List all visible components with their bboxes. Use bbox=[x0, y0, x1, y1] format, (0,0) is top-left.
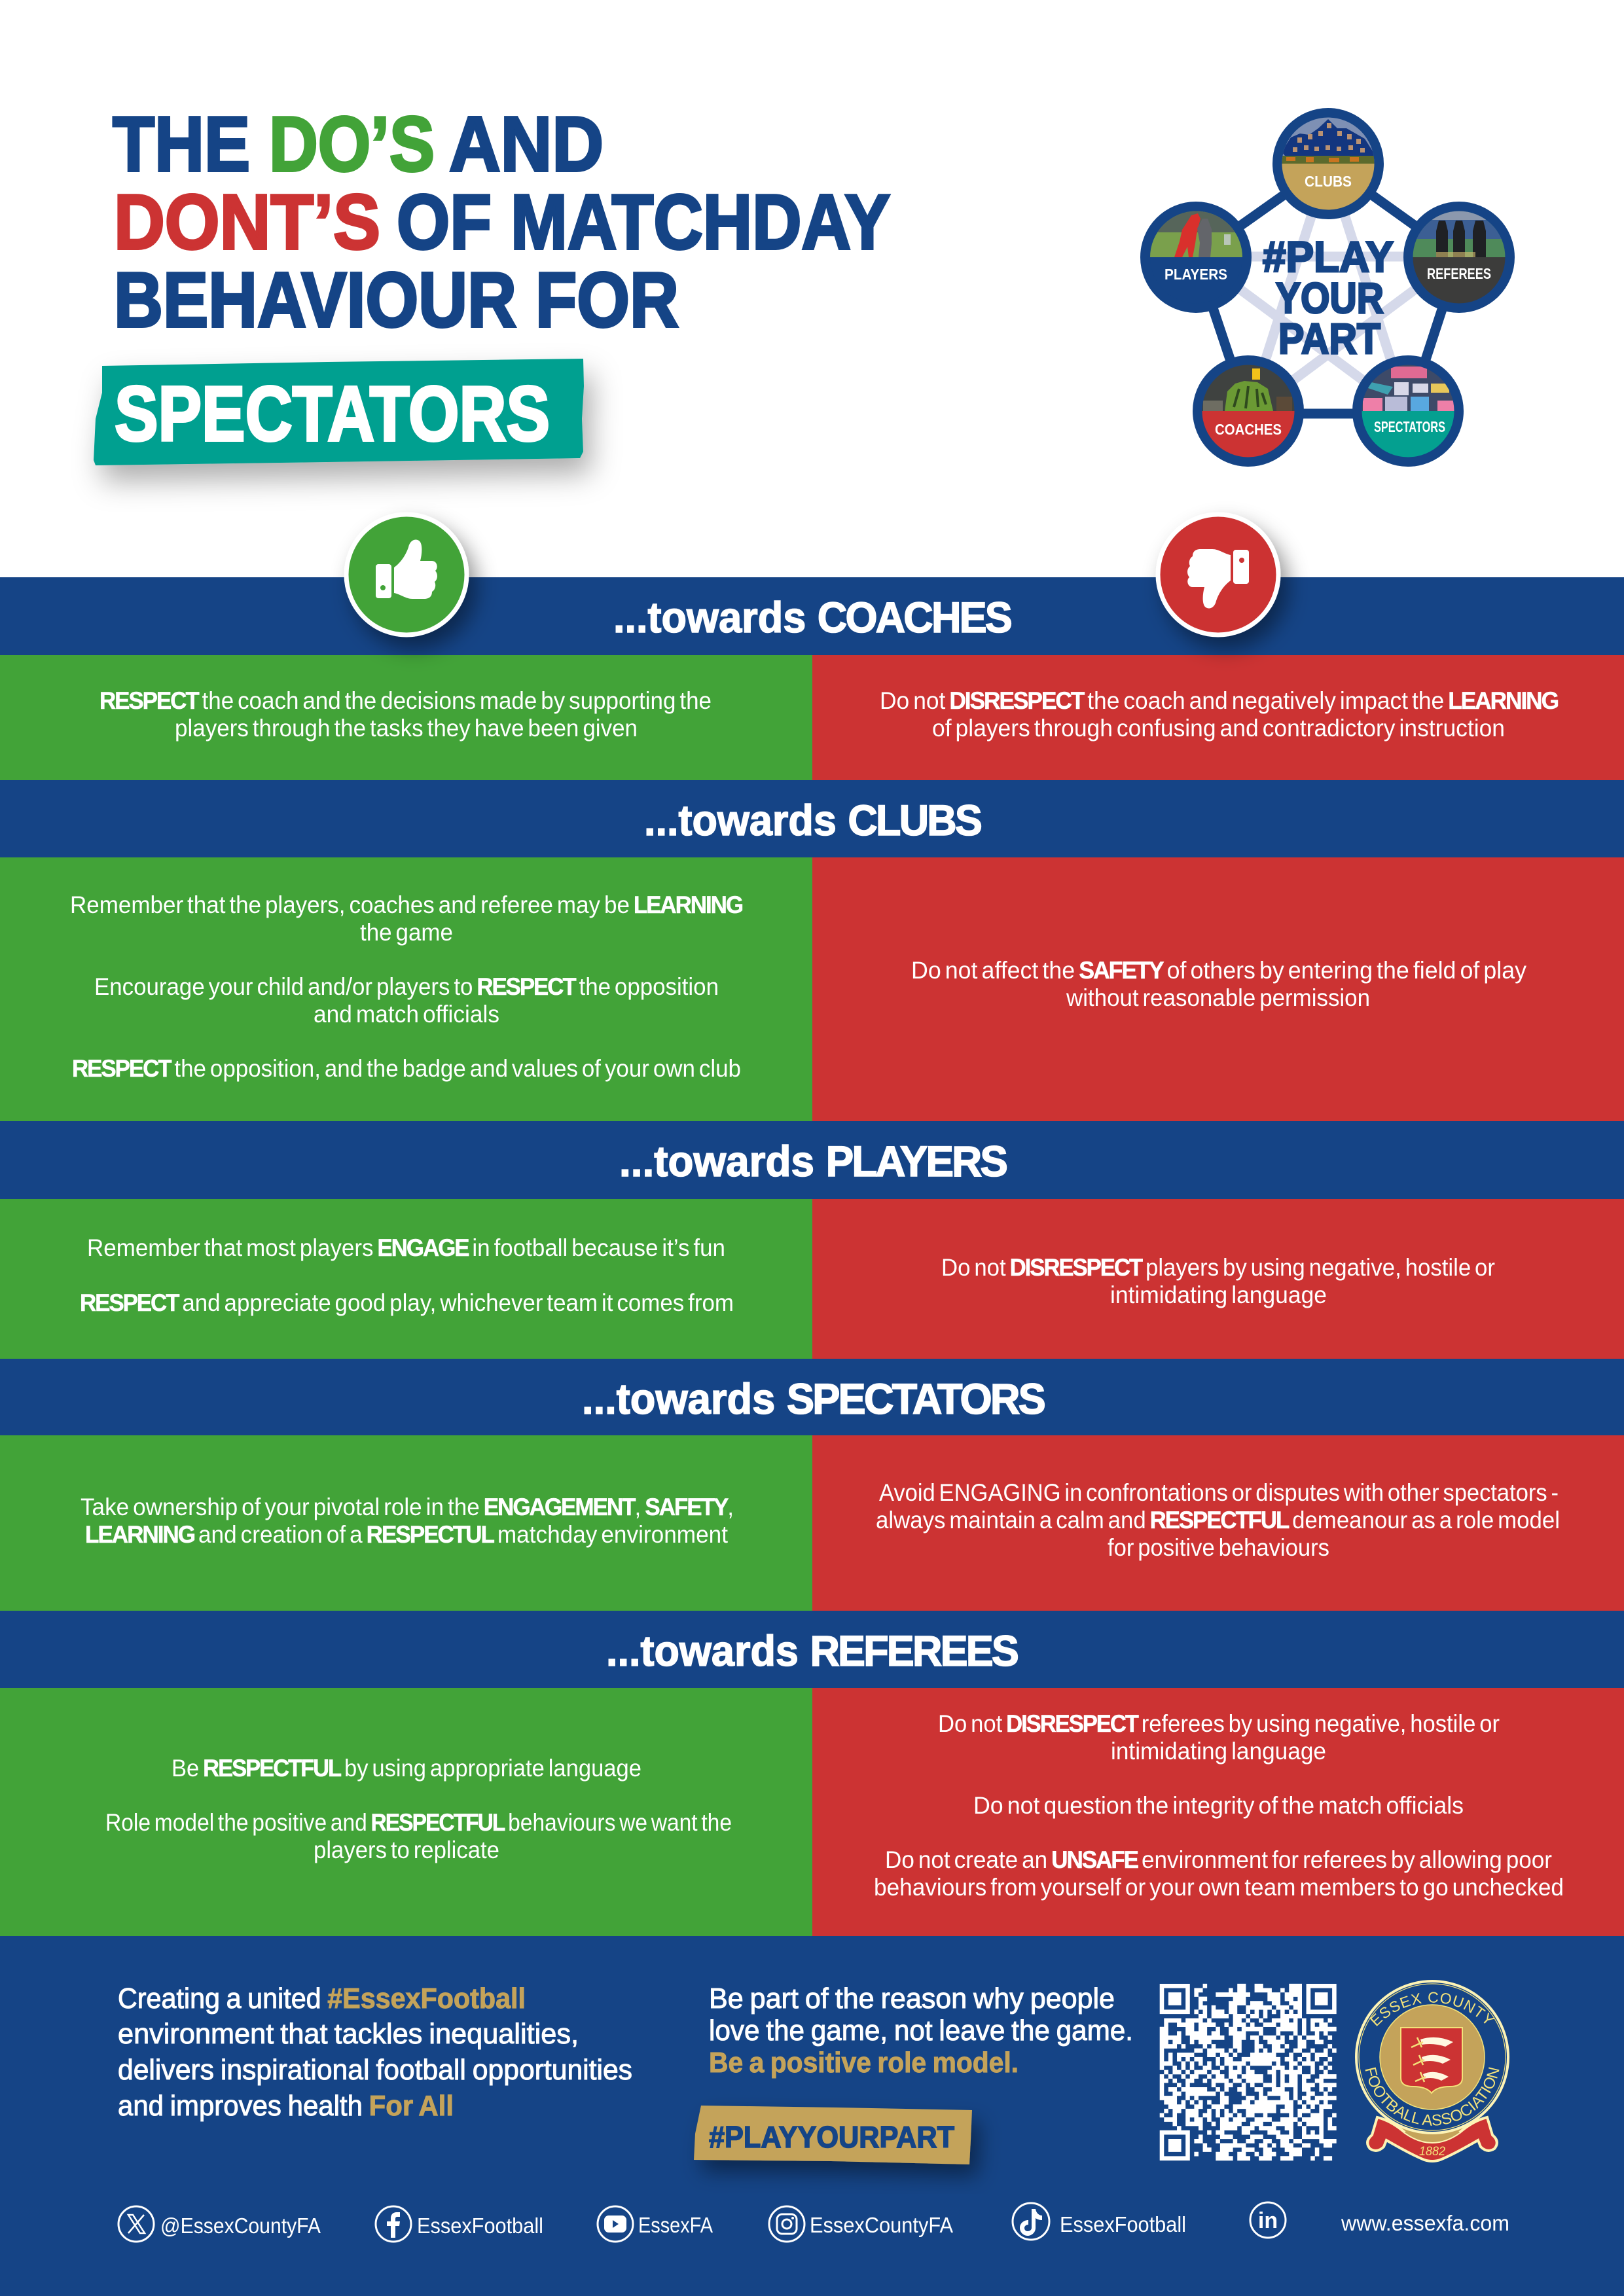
title: OF MATCHDAY bbox=[397, 179, 890, 266]
icon: thumbs up bbox=[346, 514, 467, 635]
social: linkedin: in bbox=[1258, 2208, 1278, 2233]
dont: players: intimidating language bbox=[1110, 1282, 1327, 1308]
text block: mission bbox=[118, 1982, 632, 2122]
dont: spectators: always maintain a calm and RESPECTFUL demeanour as a role model bbox=[876, 1507, 1560, 1534]
title: DO’S bbox=[269, 101, 435, 188]
qr code bbox=[1160, 1984, 1337, 2161]
node: referees: REFEREES bbox=[1427, 265, 1491, 282]
logo: essex county fa crest: FOOTBALL ASSOCIATION bbox=[1365, 2067, 1499, 2126]
dont: spectators: for positive behaviours bbox=[1108, 1534, 1329, 1561]
text block: role model: Be a positive role model. bbox=[709, 2047, 1019, 2079]
website: www.essexfa.com bbox=[1341, 2211, 1509, 2235]
heading: towards clubs: ...towards CLUBS bbox=[644, 796, 981, 844]
heading: towards coaches: ...towards COACHES bbox=[613, 593, 1011, 641]
node: players bbox=[1140, 202, 1252, 313]
hashtag: play your part: PART bbox=[1278, 314, 1380, 363]
text block: mission: delivers inspirational football opportunities bbox=[118, 2054, 632, 2086]
node: players: PLAYERS bbox=[1164, 266, 1227, 283]
social: facebook bbox=[376, 2206, 543, 2242]
do: coaches: RESPECT the coach and the decisions made by supporting the bbox=[99, 687, 712, 714]
banner bbox=[1398, 2121, 1466, 2146]
pentagon lines bbox=[1196, 164, 1459, 414]
dont: referees: behaviours from yourself or your own team members to go unchecked bbox=[874, 1874, 1564, 1901]
panel: footer bbox=[0, 1936, 1624, 2296]
do: clubs: Remember that the players, coaches and referee may be LEARNING bbox=[70, 891, 742, 918]
do: referees bbox=[0, 1688, 812, 1936]
node: spectators bbox=[1352, 355, 1464, 467]
dont: referees: intimidating language bbox=[1111, 1738, 1326, 1765]
do: coaches bbox=[0, 655, 812, 780]
node: coaches bbox=[1193, 355, 1304, 467]
social: instagram: EssexCountyFA bbox=[810, 2213, 953, 2237]
text block: mission: environment that tackles inequalities, bbox=[118, 2018, 579, 2050]
dont: clubs bbox=[812, 857, 1624, 1121]
dont: referees bbox=[812, 1688, 1624, 1936]
do: referees: players to replicate bbox=[314, 1837, 499, 1863]
dont: coaches: of players through confusing and contradictory instruction bbox=[932, 715, 1505, 742]
heading: towards coaches bbox=[0, 577, 1624, 655]
node: referees bbox=[1403, 202, 1515, 313]
text block: mission: and improves health For All bbox=[118, 2090, 454, 2122]
text block: mission: Creating a united #EssexFootball bbox=[118, 1982, 526, 2015]
text block: role model: love the game, not leave the game. bbox=[709, 2015, 1133, 2047]
dont: spectators bbox=[812, 1435, 1624, 1611]
ring bbox=[1356, 1981, 1508, 2133]
crest text: ESSEX COUNTY bbox=[1370, 1992, 1494, 2026]
title: BEHAVIOUR FOR bbox=[114, 257, 679, 344]
social: x: @EssexCountyFA bbox=[160, 2214, 321, 2238]
do: referees: Be RESPECTFUL by using appropriate language bbox=[171, 1755, 641, 1782]
do: clubs: Encourage your child and/or players to RESPECT the opposition bbox=[94, 973, 719, 1000]
shield bbox=[1401, 2028, 1462, 2093]
do: clubs bbox=[0, 857, 812, 1121]
heading: towards players: ...towards PLAYERS bbox=[619, 1137, 1007, 1185]
dont: spectators: Avoid ENGAGING in confrontations or disputes with other spectators - bbox=[879, 1479, 1559, 1506]
title: THE bbox=[113, 101, 250, 188]
node: coaches: COACHES bbox=[1215, 421, 1282, 438]
star lines bbox=[1196, 164, 1459, 414]
do: coaches: players through the tasks they have been given bbox=[175, 715, 638, 742]
title: DONT’S bbox=[114, 179, 380, 266]
node: clubs bbox=[1272, 108, 1384, 219]
logo: essex county fa crest: 1882 bbox=[1419, 2145, 1445, 2159]
dont: referees: Do not question the integrity of the match officials bbox=[973, 1792, 1464, 1819]
do: players: Remember that most players ENGAGE in football because it’s fun bbox=[87, 1234, 725, 1261]
node: spectators: SPECTATORS bbox=[1374, 418, 1445, 435]
panel: towards players bbox=[0, 1121, 1624, 1359]
heading: towards referees: ...towards REFEREES bbox=[606, 1626, 1018, 1675]
hashtag: play your part: #PLAY bbox=[1263, 232, 1394, 281]
do: spectators: Take ownership of your pivotal role in the ENGAGEMENT, SAFETY, bbox=[81, 1494, 734, 1520]
text block: role model: Be part of the reason why people bbox=[709, 1982, 1115, 2015]
badge: playyourpart: #PLAYYOURPART bbox=[709, 2120, 954, 2154]
social: tiktok bbox=[1013, 2203, 1186, 2240]
do: clubs: RESPECT the opposition, and the badge and values of your own club bbox=[72, 1055, 741, 1082]
dont: players: Do not DISRESPECT players by using negative, hostile or bbox=[941, 1254, 1495, 1281]
dont: coaches bbox=[812, 655, 1624, 780]
badge: playyourpart bbox=[694, 2106, 972, 2164]
social: x bbox=[118, 2206, 321, 2242]
do: spectators bbox=[0, 1435, 812, 1611]
social: tiktok: EssexFootball bbox=[1060, 2212, 1186, 2236]
panel: towards spectators bbox=[0, 1359, 1624, 1611]
dont: clubs: without reasonable permission bbox=[1066, 984, 1370, 1011]
social: instagram bbox=[769, 2206, 953, 2242]
dont: referees: Do not DISRESPECT referees by using negative, hostile or bbox=[938, 1710, 1500, 1737]
do: referees: Role model the positive and RESPECTFUL behaviours we want the bbox=[105, 1809, 732, 1836]
do: players: RESPECT and appreciate good play, whichever team it comes from bbox=[80, 1289, 734, 1316]
do: players bbox=[0, 1199, 812, 1359]
do: clubs: and match officials bbox=[314, 1001, 499, 1028]
heading: towards spectators: ...towards SPECTATORS bbox=[582, 1374, 1045, 1423]
title bbox=[113, 101, 890, 344]
logo: essex county fa crest bbox=[1355, 1980, 1509, 2162]
hashtag: play your part bbox=[1263, 232, 1394, 363]
heading: towards clubs bbox=[0, 780, 1624, 857]
seaxes bbox=[1420, 2037, 1453, 2047]
node: clubs: CLUBS bbox=[1305, 173, 1352, 190]
do: spectators: LEARNING and creation of a RESPECTUL matchday environment bbox=[85, 1521, 729, 1548]
social: facebook: EssexFootball bbox=[417, 2214, 543, 2238]
heading: towards referees bbox=[0, 1611, 1624, 1688]
graphic: play your part pentagon bbox=[1140, 108, 1515, 467]
social: youtube: EssexFA bbox=[638, 2213, 713, 2237]
dont: referees: Do not create an UNSAFE environment for referees by allowing poor bbox=[885, 1846, 1552, 1873]
dont: players bbox=[812, 1199, 1624, 1359]
heading: towards players bbox=[0, 1121, 1624, 1199]
do: clubs: the game bbox=[360, 919, 453, 946]
heading: towards spectators bbox=[0, 1359, 1624, 1435]
panel: towards clubs bbox=[0, 780, 1624, 1121]
panel: towards referees bbox=[0, 1611, 1624, 1936]
text block: role model bbox=[709, 1982, 1133, 2079]
badge: spectators: SPECTATORS bbox=[115, 370, 550, 457]
dont: clubs: Do not affect the SAFETY of others by entering the field of play bbox=[911, 957, 1526, 984]
hashtag: play your part: YOUR bbox=[1276, 274, 1384, 322]
title: AND bbox=[449, 101, 604, 188]
panel: towards coaches bbox=[0, 577, 1624, 780]
icon: thumbs down bbox=[1158, 514, 1278, 635]
social: youtube bbox=[598, 2206, 713, 2242]
social: linkedin bbox=[1250, 2202, 1286, 2238]
dont: coaches: Do not DISRESPECT the coach and negatively impact the LEARNING bbox=[880, 687, 1558, 714]
